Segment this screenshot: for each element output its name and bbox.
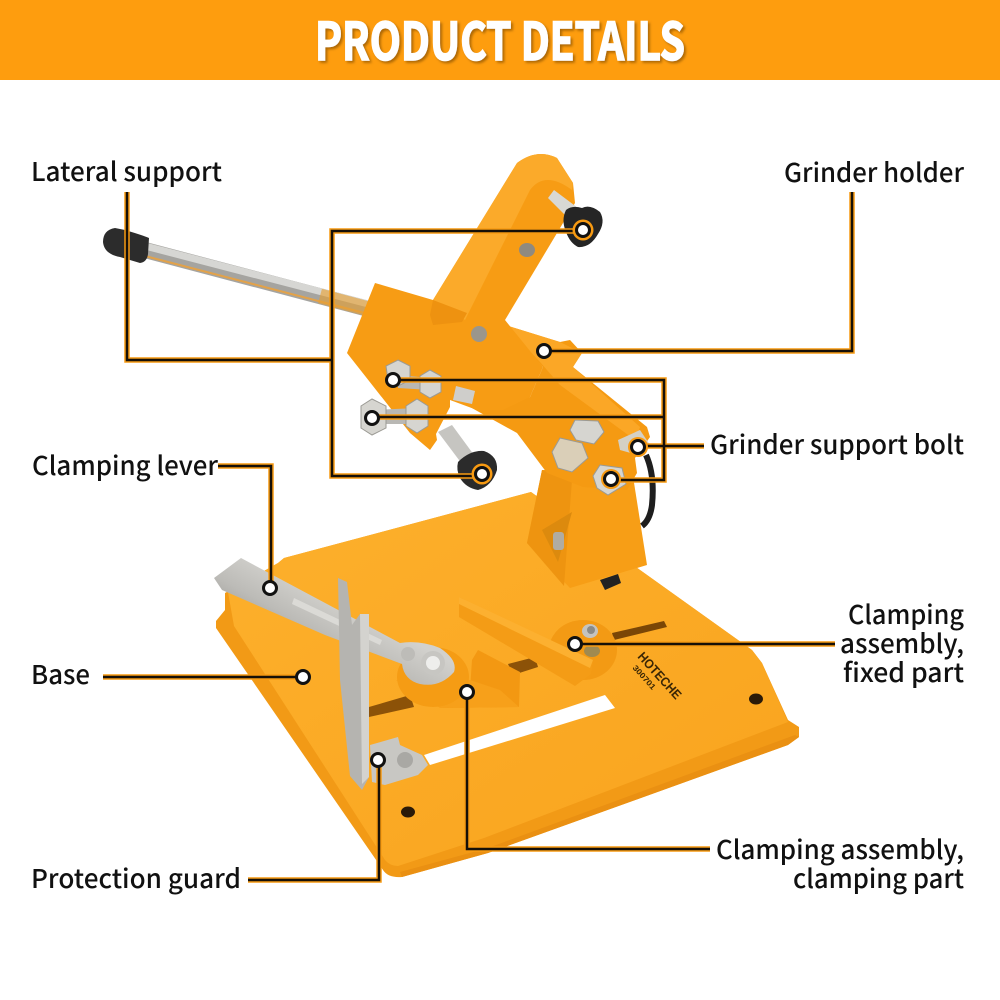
- label: protection guard: Protection guard: [31, 859, 241, 896]
- callout: lateral support: [127, 192, 594, 484]
- label: base: Base: [31, 655, 90, 692]
- threaded holes: [519, 243, 535, 257]
- arc band: [470, 325, 650, 490]
- label: clamping assembly, fixed part: [840, 595, 964, 690]
- bolts: [361, 190, 650, 495]
- brand mark: 300701: [631, 663, 658, 692]
- black knobs: [457, 207, 603, 490]
- callout: grinder holder: [538, 192, 852, 358]
- callout: grinder support bolt: [366, 374, 704, 489]
- base plate: [216, 492, 799, 877]
- lever plate: [214, 558, 455, 685]
- label: clamping lever: Clamping lever: [32, 446, 218, 483]
- clamping assembly fixed part: disc and fence: [459, 597, 617, 686]
- clamping assembly clamping part: hub and wedge: [396, 647, 520, 708]
- protection guard: [338, 578, 428, 790]
- header banner: [0, 0, 1000, 80]
- rod handle: [103, 228, 376, 316]
- label: clamping assembly, clamping part: Clamping assembly,: [716, 830, 964, 867]
- callout: protection guard: [248, 754, 384, 880]
- base slots: [612, 621, 667, 640]
- product: angle grinder stand: [103, 154, 799, 877]
- power cord: [642, 455, 653, 526]
- mounting holes: [401, 806, 415, 818]
- label: clamping assembly, clamping part: [716, 830, 964, 896]
- label: clamping assembly, clamping part: clamping part: [793, 859, 964, 896]
- callout: base: [103, 670, 310, 684]
- label: lateral support: Lateral support: [31, 152, 222, 189]
- label: grinder holder: Grinder holder: [784, 153, 964, 190]
- side plate: [347, 154, 575, 450]
- callout: clamping assembly fixed part: [568, 638, 835, 650]
- support column: [527, 470, 647, 588]
- label: grinder support bolt: Grinder support bolt: [710, 425, 964, 462]
- label: clamping assembly, fixed part: fixed part: [843, 653, 964, 690]
- callout: clamping lever: [218, 466, 276, 594]
- white slit: [424, 695, 615, 765]
- title: PRODUCT DETAILS: [315, 0, 685, 75]
- label: clamping assembly, fixed part: assembly,: [840, 624, 964, 661]
- callout: clamping assembly clamping part: [460, 686, 710, 849]
- arm and arc bracket: [347, 154, 650, 490]
- brand mark: HOTECHE: [635, 649, 685, 702]
- label: clamping assembly, fixed part: Clamping: [848, 595, 964, 632]
